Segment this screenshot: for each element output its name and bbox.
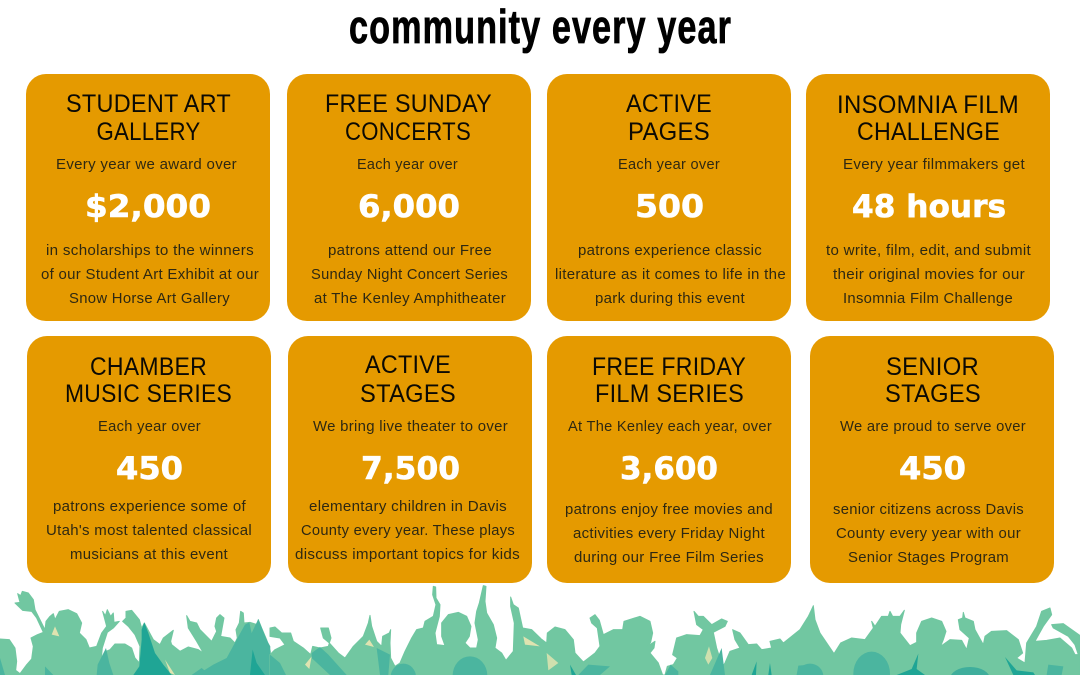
description: Insomnia Film Challenge bbox=[843, 290, 1013, 307]
big number: 3,600 bbox=[620, 451, 718, 487]
description: in scholarships to the winners bbox=[46, 242, 254, 259]
description: during our Free Film Series bbox=[574, 549, 764, 566]
crowd silhouette bbox=[0, 586, 1080, 675]
intro text: We bring live theater to over bbox=[313, 418, 508, 435]
panel: Insomnia Film Challenge bbox=[806, 74, 1050, 321]
description: County every year with our bbox=[836, 525, 1021, 542]
card background bbox=[27, 336, 271, 583]
heading: GALLERY bbox=[96, 118, 201, 146]
intro text: Each year over bbox=[357, 156, 458, 173]
description: Utah's most talented classical bbox=[46, 522, 252, 539]
heading: INSOMNIA FILM bbox=[837, 91, 1019, 119]
description: to write, film, edit, and submit bbox=[826, 242, 1032, 259]
card background bbox=[810, 336, 1054, 583]
description: Senior Stages Program bbox=[848, 549, 1009, 566]
description: senior citizens across Davis bbox=[833, 501, 1024, 518]
description: literature as it comes to life in the bbox=[555, 266, 786, 283]
title: community every year bbox=[349, 0, 732, 53]
big number: 450 bbox=[116, 451, 183, 487]
panel: Active Stages bbox=[288, 336, 532, 583]
heading: STUDENT ART bbox=[66, 90, 231, 118]
description: Sunday Night Concert Series bbox=[311, 266, 508, 283]
description: elementary children in Davis bbox=[309, 498, 507, 515]
intro text: At The Kenley each year, over bbox=[568, 418, 772, 435]
card background bbox=[287, 74, 531, 321]
description: County every year. These plays bbox=[301, 522, 515, 539]
description bbox=[555, 242, 786, 307]
description: patrons experience some of bbox=[53, 498, 247, 515]
heading: ACTIVE bbox=[365, 351, 451, 379]
heading bbox=[626, 90, 712, 146]
description bbox=[565, 501, 773, 566]
description bbox=[826, 242, 1032, 307]
heading: SENIOR bbox=[886, 353, 979, 381]
panel: Free Friday Film Series bbox=[547, 336, 791, 583]
intro text: We are proud to serve over bbox=[840, 418, 1026, 435]
card background bbox=[26, 74, 270, 321]
heading: ACTIVE bbox=[626, 90, 712, 118]
heading bbox=[325, 90, 492, 146]
description: park during this event bbox=[595, 290, 746, 307]
big number: 450 bbox=[899, 451, 966, 487]
heading: STAGES bbox=[360, 380, 456, 408]
heading: STAGES bbox=[885, 380, 981, 408]
big number: 7,500 bbox=[361, 451, 460, 487]
description: at The Kenley Amphitheater bbox=[314, 290, 506, 307]
big number: 500 bbox=[635, 189, 704, 225]
heading bbox=[885, 353, 981, 408]
panel: Free Sunday Concerts bbox=[287, 74, 531, 321]
panel: Chamber Music Series bbox=[27, 336, 271, 583]
heading: CONCERTS bbox=[345, 118, 471, 146]
description bbox=[311, 242, 508, 307]
description: activities every Friday Night bbox=[573, 525, 766, 542]
panel: Active Pages bbox=[547, 74, 791, 321]
intro text: Each year over bbox=[618, 156, 720, 173]
description bbox=[295, 498, 520, 563]
description bbox=[41, 242, 259, 307]
heading: PAGES bbox=[628, 118, 710, 146]
heading bbox=[592, 353, 746, 408]
card background bbox=[547, 336, 791, 583]
heading: FREE SUNDAY bbox=[325, 90, 492, 118]
description: of our Student Art Exhibit at our bbox=[41, 266, 259, 283]
description: musicians at this event bbox=[70, 546, 229, 563]
description: discuss important topics for kids bbox=[295, 546, 520, 563]
heading: MUSIC SERIES bbox=[65, 380, 232, 408]
big number: $2,000 bbox=[85, 189, 211, 225]
intro text: Every year we award over bbox=[56, 156, 237, 173]
heading bbox=[837, 91, 1019, 146]
heading bbox=[65, 353, 232, 408]
description: patrons attend our Free bbox=[328, 242, 492, 259]
heading bbox=[66, 90, 231, 146]
heading: CHALLENGE bbox=[857, 118, 1000, 146]
panel: Student Art Gallery bbox=[26, 74, 270, 321]
heading: FREE FRIDAY bbox=[592, 353, 746, 381]
description: their original movies for our bbox=[833, 266, 1025, 283]
card background bbox=[288, 336, 532, 583]
card background bbox=[806, 74, 1050, 321]
description bbox=[833, 501, 1024, 566]
description: patrons enjoy free movies and bbox=[565, 501, 773, 518]
big number: 6,000 bbox=[358, 189, 460, 225]
heading: CHAMBER bbox=[90, 353, 207, 381]
intro text: Each year over bbox=[98, 418, 201, 435]
heading: FILM SERIES bbox=[595, 380, 744, 408]
big number: 48 hours bbox=[852, 189, 1006, 225]
card background bbox=[547, 74, 791, 321]
description bbox=[46, 498, 252, 563]
intro text: Every year filmmakers get bbox=[843, 156, 1026, 173]
panel: Senior Stages bbox=[810, 336, 1054, 583]
description: patrons experience classic bbox=[578, 242, 762, 259]
description: Snow Horse Art Gallery bbox=[69, 290, 230, 307]
heading bbox=[360, 351, 456, 408]
